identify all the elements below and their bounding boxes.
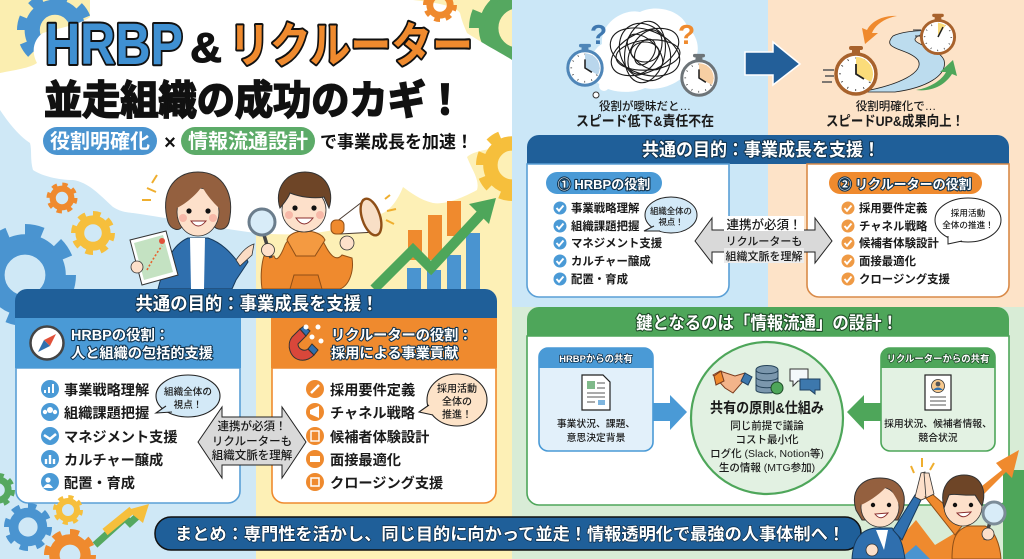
list items: カルチャー醸成 (64, 452, 163, 469)
arrow: collaboration double arrow: 組織文脈を理解 (212, 448, 293, 462)
list items: 面接最適化 (330, 452, 401, 469)
icon: handshake (713, 371, 752, 393)
checklist: 候補者体験設計 (859, 236, 939, 250)
subtitle with pills: 情報流通設計 (188, 130, 308, 153)
arrow: collaboration double arrow: 連携が必須！ (726, 217, 802, 232)
map tablet (130, 231, 178, 285)
scribble (604, 14, 686, 90)
callout: 視点！ (658, 217, 684, 227)
checklist: チャネル戦略 (859, 219, 928, 233)
callout: 全体の (442, 395, 472, 408)
callout (419, 374, 487, 426)
list items: 候補者体験設計 (330, 429, 429, 446)
circle: principles: 共有の原則&仕組み (710, 400, 824, 417)
stopwatch small (921, 14, 955, 54)
box: HRBP share: HRBPからの共有 (559, 353, 633, 364)
checklist: カルチャー醸成 (571, 254, 651, 268)
subtitle with pills (43, 127, 473, 155)
arrow: collaboration double arrow: リクルーターも (212, 435, 292, 448)
callout (644, 197, 697, 233)
background: left half (0, 0, 512, 559)
box: recruiter share: 競合状況 (918, 431, 958, 444)
arrow: green (847, 395, 881, 430)
arrow: transition (745, 42, 800, 85)
box: HRBP share: 意思決定背景 (567, 431, 626, 444)
callout: 視点！ (174, 399, 202, 411)
header bar: 共通の目的：事業成長を支援！ (642, 139, 880, 160)
icon: compass (30, 326, 64, 360)
header bar (527, 135, 1009, 164)
summary banner: まとめ：専門性を活かし、同じ目的に向かって並走！情報透明化で最強の人事体制へ！ (175, 524, 845, 544)
title: 並走組織の成功のカギ！ (44, 79, 464, 123)
subtitle with pills: で事業成長を加速！ (320, 132, 473, 152)
river (860, 30, 944, 92)
panel: information flow design (527, 307, 1009, 505)
stopwatch large (836, 46, 876, 94)
summary banner (155, 517, 861, 550)
callout: 全体の推進！ (942, 219, 994, 230)
growth chart illustration (374, 198, 496, 289)
illustration: clear state: スピードUP&成果向上！ (826, 113, 964, 130)
header bar (527, 307, 1009, 336)
role pill: ② リクルーターの役割 (838, 177, 972, 192)
callout (156, 375, 220, 417)
callout (935, 198, 1001, 244)
megaphone (331, 195, 396, 250)
header bar: 鍵となるのは「情報流通」の設計！ (636, 313, 898, 333)
checklist: 配置・育成 (571, 272, 629, 286)
subtitle with pills: × (164, 132, 176, 154)
circle: principles: コスト最小化 (736, 434, 799, 446)
illustration: confused state: スピード低下&責任不在 (576, 113, 714, 130)
list items: 配置・育成 (64, 475, 135, 492)
checklist (842, 201, 951, 286)
circle: principles (691, 342, 843, 494)
circle: principles: 同じ前提で議論 (730, 419, 804, 432)
checklist (554, 201, 663, 286)
white cloud behind title (0, 0, 512, 234)
arrow: collaboration double arrow: 連携が必須！ (218, 419, 286, 433)
characters: high five (852, 458, 1005, 559)
callout: 採用活動 (437, 382, 477, 395)
role pill: ① HRBPの役割 (558, 177, 650, 192)
box: recruiter share: リクルーターからの共有 (887, 353, 989, 364)
character: woman with map (130, 172, 254, 289)
list items: 組織課題把握 (64, 405, 149, 422)
title (44, 12, 473, 123)
panel: recruiter role: 採用による事業貢献 (331, 345, 458, 362)
checklist: 事業戦略理解 (571, 201, 640, 215)
box: recruiter share: 採用状況、候補者情報、 (884, 417, 992, 430)
panel: HRBP role: 人と組織の包括的支援 (71, 345, 213, 362)
illustration: clear state: 役割明確化で… (856, 99, 936, 113)
arrow green (916, 60, 957, 90)
man (924, 473, 1005, 559)
stopwatch blue (568, 44, 602, 85)
circle: principles: ログ化 (Slack, Notion等) (710, 447, 824, 460)
panel: HRBP role (15, 318, 241, 503)
header bar: 共通の目的：事業成長を支援！ (136, 293, 378, 314)
icon: document (582, 375, 610, 410)
callout: 推進！ (442, 408, 472, 421)
callout: 組織全体の (164, 386, 212, 398)
list items: チャネル戦略 (330, 405, 416, 422)
header bar (15, 289, 497, 318)
illustration: confused state: 役割が曖昧だと… (599, 99, 691, 113)
list items: マネジメント支援 (64, 429, 178, 446)
arrow orange (862, 16, 897, 44)
decorative gears behind cloud (23, 0, 559, 69)
box: HRBP share: 事業状況、課題、 (557, 417, 635, 430)
box: HRBP share (539, 348, 653, 451)
icon: chat (790, 369, 820, 394)
checklist: マネジメント支援 (571, 236, 663, 250)
decorative gears and arrow bottom left (0, 476, 149, 559)
box: recruiter share (881, 348, 995, 451)
illustration: confused state: ? (678, 19, 695, 50)
title: HRBP (45, 12, 183, 77)
arrow: blue (653, 395, 687, 430)
woman (852, 472, 926, 559)
role pill (546, 172, 662, 194)
character: man with magnifier and megaphone (249, 172, 396, 289)
checklist: 面接最適化 (859, 254, 917, 268)
panel: recruiter role: リクルーターの役割： (331, 327, 472, 344)
list items: 採用要件定義 (330, 382, 415, 399)
callout: 採用活動 (951, 207, 986, 218)
magnifier (249, 209, 275, 258)
arrow: collaboration double arrow: リクルーターも (726, 235, 802, 248)
icon: magnet (289, 324, 324, 360)
role pill (829, 172, 982, 194)
title: リクルーター (229, 20, 473, 73)
icon: database (756, 366, 783, 394)
checklist: クロージング支援 (859, 272, 951, 286)
circle: principles: 生の情報 (MTG参加) (719, 461, 815, 474)
callout: 組織全体の (650, 206, 692, 216)
illustration: rising chart bottom right (882, 450, 1024, 559)
illustration: clear state (822, 14, 964, 130)
stopwatch grey (682, 54, 716, 95)
background: right half (512, 0, 1024, 559)
panel: recruiter role (271, 318, 497, 503)
list items: クロージング支援 (330, 475, 443, 492)
illustration: confused state (568, 9, 716, 130)
list items (306, 380, 443, 492)
checklist: 採用要件定義 (859, 201, 928, 215)
thought cloud (591, 9, 698, 92)
panel: shared purpose left (15, 289, 497, 503)
arrow: collaboration double arrow: 組織文脈を理解 (726, 249, 802, 263)
decorative gears on cloud (0, 0, 542, 318)
arrow: collaboration double arrow (198, 407, 306, 478)
panel: shared purpose right (527, 135, 1009, 297)
list items (41, 380, 178, 492)
magnifier (982, 502, 1005, 540)
panel: HRBP role (527, 164, 729, 297)
title: & (190, 24, 222, 71)
panel: recruiter role (807, 164, 1009, 297)
icon: resume (925, 375, 951, 410)
panel: HRBP role: HRBPの役割： (71, 326, 169, 344)
question marks: ? (590, 19, 607, 50)
subtitle with pills: 役割明確化 (50, 130, 150, 153)
list items: 事業戦略理解 (64, 382, 149, 399)
checklist: 組織課題把握 (571, 219, 640, 233)
arrow: collaboration double arrow (695, 216, 832, 263)
